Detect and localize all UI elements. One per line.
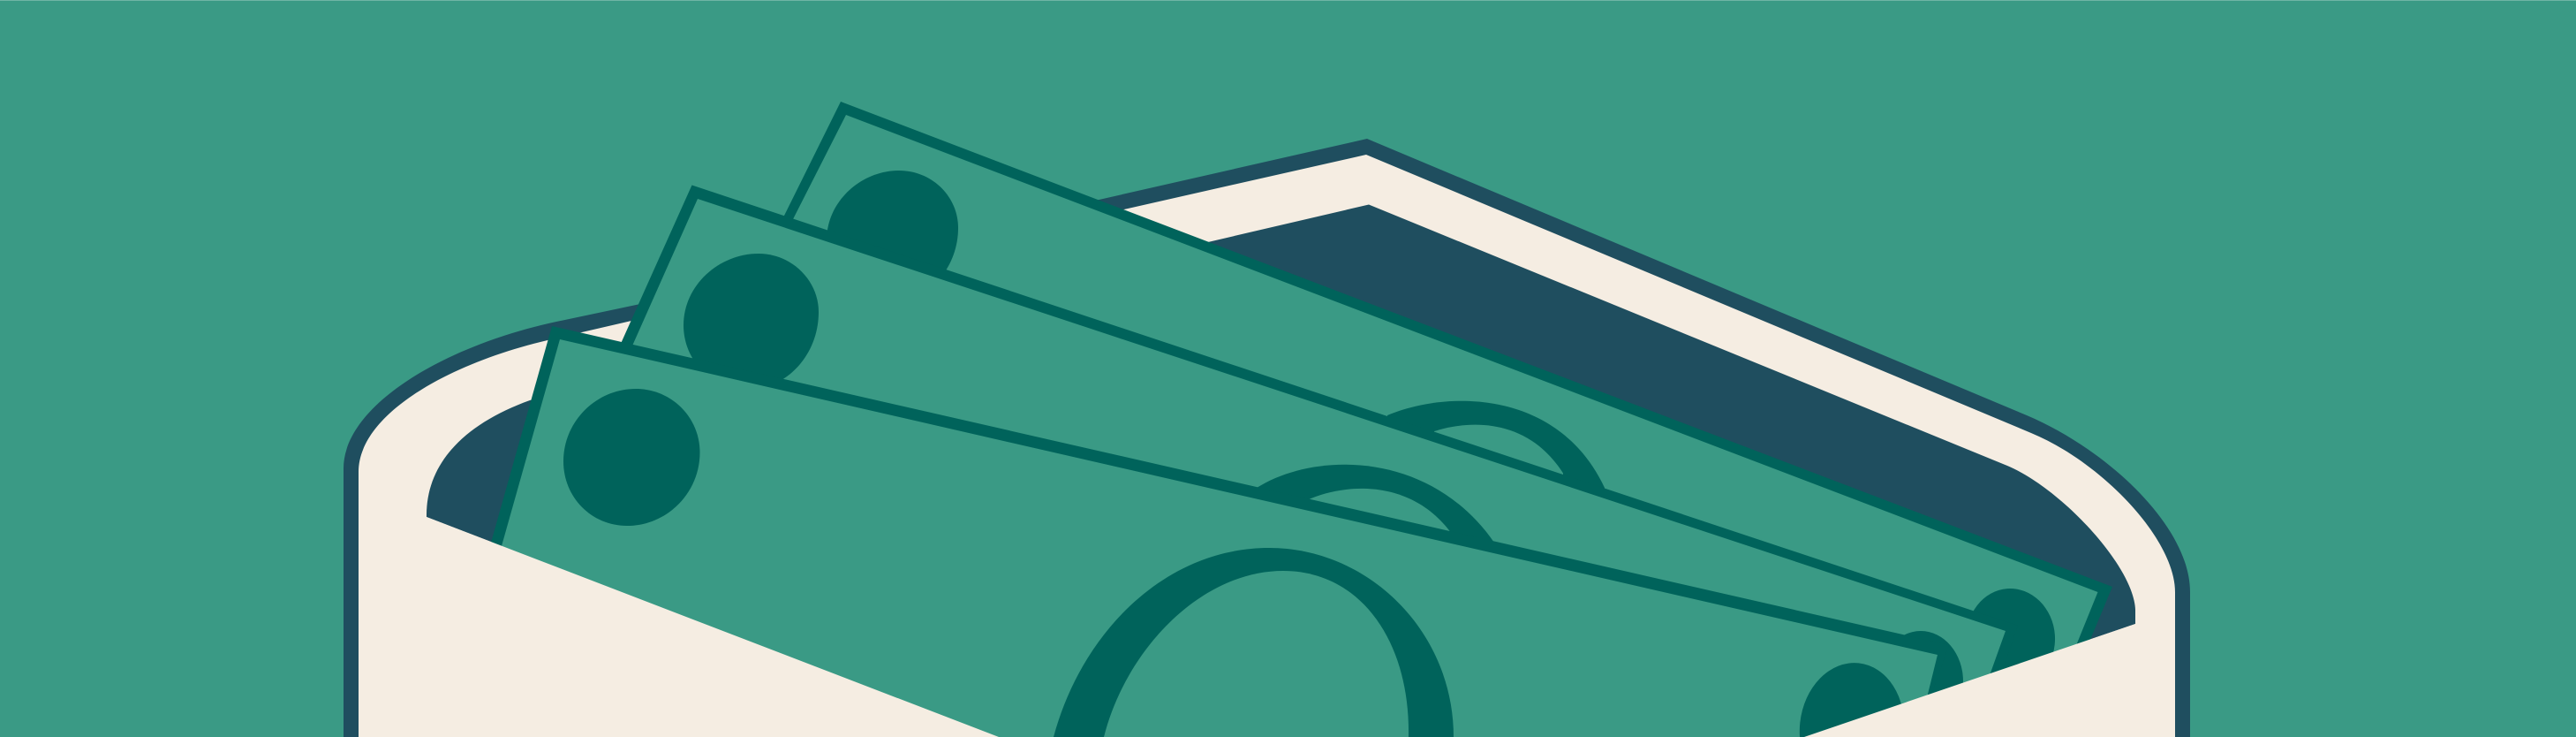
- middle banknote: [444, 186, 2018, 737]
- wallet body outline: [344, 139, 2190, 737]
- wallet body cream: [359, 155, 2175, 737]
- middle banknote right seal: [1878, 631, 1963, 732]
- front banknote face: [448, 339, 1938, 737]
- front banknote center ring outer: [1054, 548, 1454, 737]
- back banknote: [525, 102, 2112, 737]
- front banknote border: [436, 326, 1949, 737]
- back banknote right seal: [1963, 586, 2059, 690]
- middle banknote border: [444, 186, 2018, 737]
- middle banknote left seal: [684, 254, 819, 390]
- front banknote center ring inner: [1104, 571, 1409, 737]
- back banknote left seal: [827, 171, 958, 305]
- middle banknote face: [458, 199, 2006, 737]
- back banknote center ring: [1387, 401, 1605, 530]
- back banknote ring opening: [1434, 425, 1563, 495]
- front banknote right seal: [1794, 657, 1910, 737]
- middle banknote ring opening: [1308, 489, 1450, 566]
- middle banknote center ring: [1257, 465, 1494, 583]
- wallet illustration: [344, 102, 2190, 737]
- front banknote left seal: [563, 389, 699, 526]
- wallet front flap: [359, 517, 2175, 737]
- flap right side: [1804, 624, 2175, 737]
- back banknote border: [525, 102, 2112, 737]
- flap left side: [359, 517, 999, 737]
- wallet dark interior: [427, 205, 2135, 737]
- front banknote: [436, 326, 1949, 737]
- back banknote face: [530, 115, 2098, 737]
